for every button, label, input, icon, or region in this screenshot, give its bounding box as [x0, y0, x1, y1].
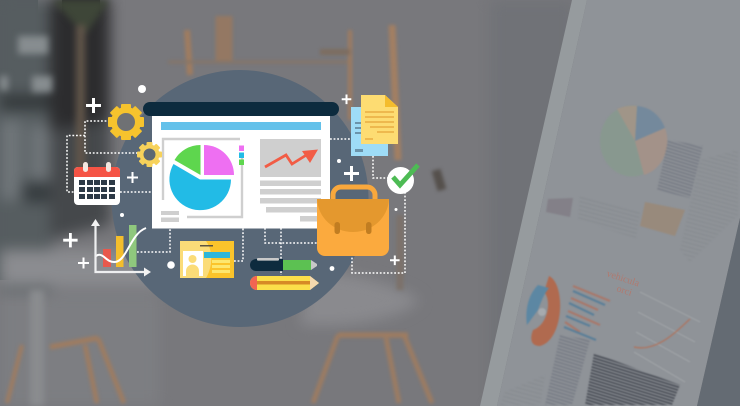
icon: documents — [351, 95, 398, 156]
large slate circle backdrop — [112, 70, 368, 327]
screen roller bar — [143, 102, 339, 116]
icon: calendar — [74, 162, 120, 205]
background dense text blocks — [546, 140, 702, 406]
icon: briefcase — [317, 187, 389, 256]
pie legend — [239, 146, 244, 165]
icon: pencil — [250, 276, 319, 290]
blurred highlights near window — [0, 36, 52, 92]
screen panel — [152, 114, 330, 228]
icon: growth chart — [91, 219, 151, 276]
icon: large gear — [108, 104, 144, 140]
background chart heading: vehicula — [605, 268, 641, 289]
background donut chart — [526, 276, 560, 346]
icon: small gear — [137, 142, 162, 167]
blurred wooden shelf and stools — [7, 16, 442, 403]
trend thumbnail — [260, 139, 321, 177]
whiteboard with printed charts: orci — [615, 283, 633, 299]
icon: marker pen — [250, 258, 317, 271]
background bar chart — [564, 286, 610, 340]
background line chart — [634, 292, 700, 382]
icon: check mark badge — [387, 165, 418, 194]
text lines — [260, 180, 321, 222]
background pie chart — [600, 106, 667, 176]
chart frame — [163, 139, 242, 217]
dotted connector lines — [67, 121, 405, 275]
whiteboard with printed charts — [480, 0, 740, 406]
icon: ID card — [180, 241, 234, 278]
caption bars — [161, 211, 179, 222]
decorative plus signs and dots — [63, 85, 400, 271]
pie chart — [169, 145, 234, 210]
screen header strip — [161, 122, 321, 130]
blurred plant — [30, 0, 110, 406]
presentation screen — [143, 102, 339, 228]
